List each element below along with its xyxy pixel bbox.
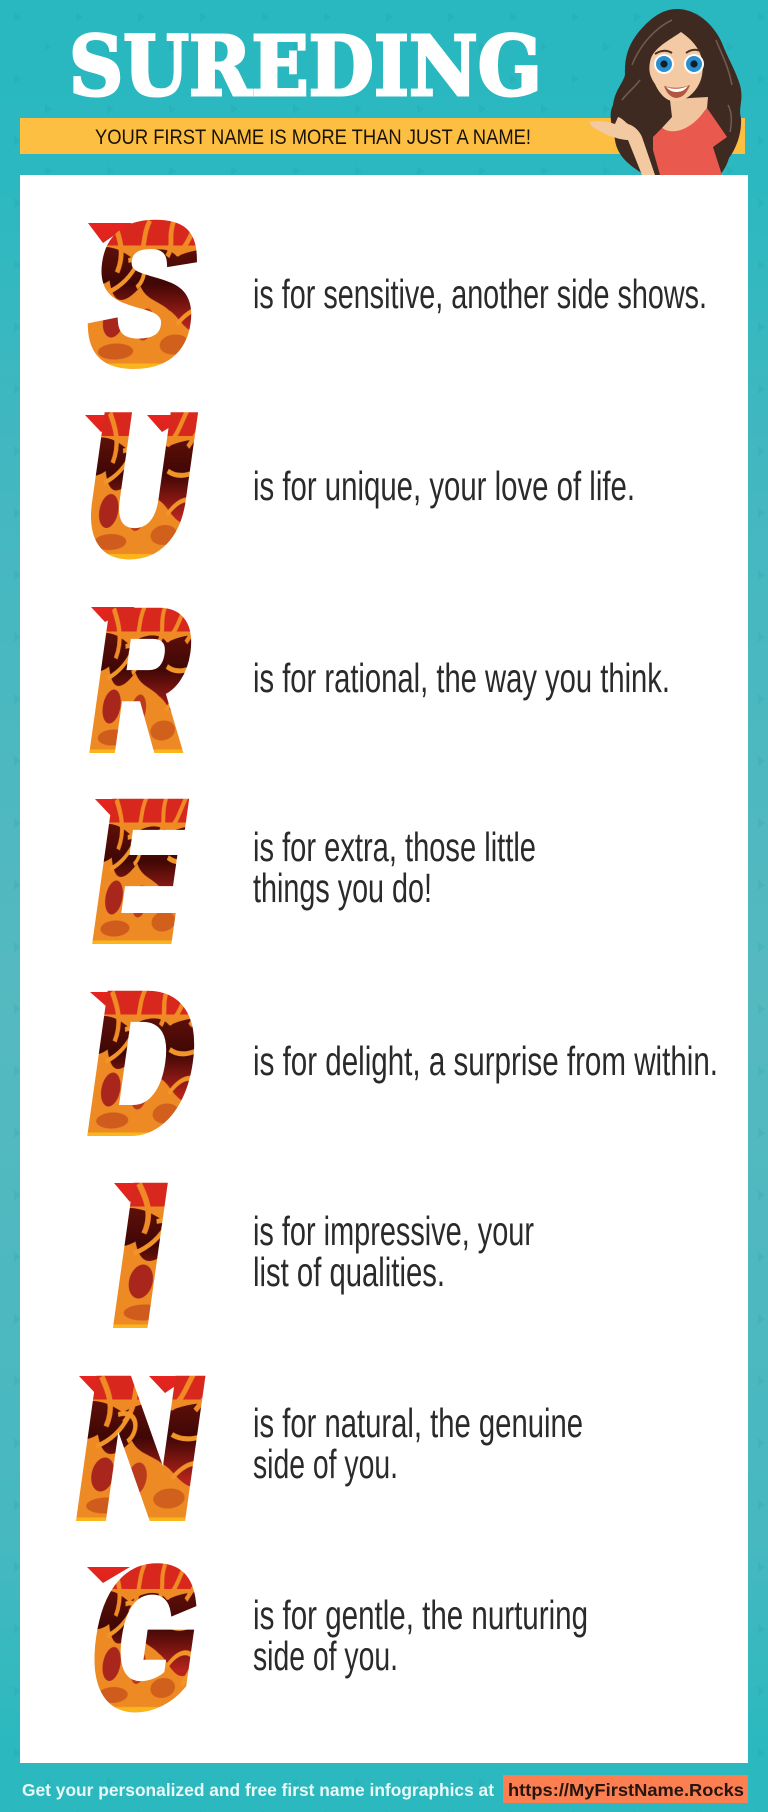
footer call to action: Get your personalized and free first name infographics at xyxy=(22,1780,494,1800)
icon: cartoon woman presenting xyxy=(590,9,741,175)
fire letter R: R xyxy=(78,571,206,791)
description G: is for gentle, the nurturing xyxy=(253,1592,588,1638)
fire letter S: S xyxy=(76,185,213,405)
row: S xyxy=(76,185,707,405)
description I xyxy=(253,1208,534,1295)
fire letter N: N xyxy=(63,1337,219,1559)
description I: list of qualities. xyxy=(253,1249,445,1295)
row: D xyxy=(76,952,718,1173)
title: SUREDING xyxy=(69,19,542,115)
tagline banner xyxy=(20,118,745,154)
description E: things you do! xyxy=(253,865,432,911)
fire letter U: U xyxy=(74,374,209,595)
description I: is for impressive, your xyxy=(253,1208,534,1254)
description G: side of you. xyxy=(253,1633,398,1679)
footer link badge xyxy=(503,1775,748,1803)
description N: is for natural, the genuine xyxy=(253,1400,583,1446)
row: E xyxy=(81,760,536,982)
fire letter G: G xyxy=(78,1528,214,1749)
description E: is for extra, those little xyxy=(253,824,536,870)
description N xyxy=(253,1400,583,1487)
row: R xyxy=(78,571,670,791)
fire letter D: D xyxy=(76,952,211,1173)
fire letter E: E xyxy=(81,760,199,982)
description G xyxy=(253,1592,588,1679)
description E xyxy=(253,824,536,911)
row: I xyxy=(100,1144,534,1366)
row: U xyxy=(74,374,635,595)
row: N xyxy=(63,1337,583,1559)
tagline text: YOUR FIRST NAME IS MORE THAN JUST A NAME! xyxy=(95,126,531,149)
description N: side of you. xyxy=(253,1441,398,1487)
footer link badge: https://MyFirstName.Rocks xyxy=(508,1780,744,1800)
fire letter I: I xyxy=(100,1144,181,1366)
row: G xyxy=(78,1528,588,1749)
